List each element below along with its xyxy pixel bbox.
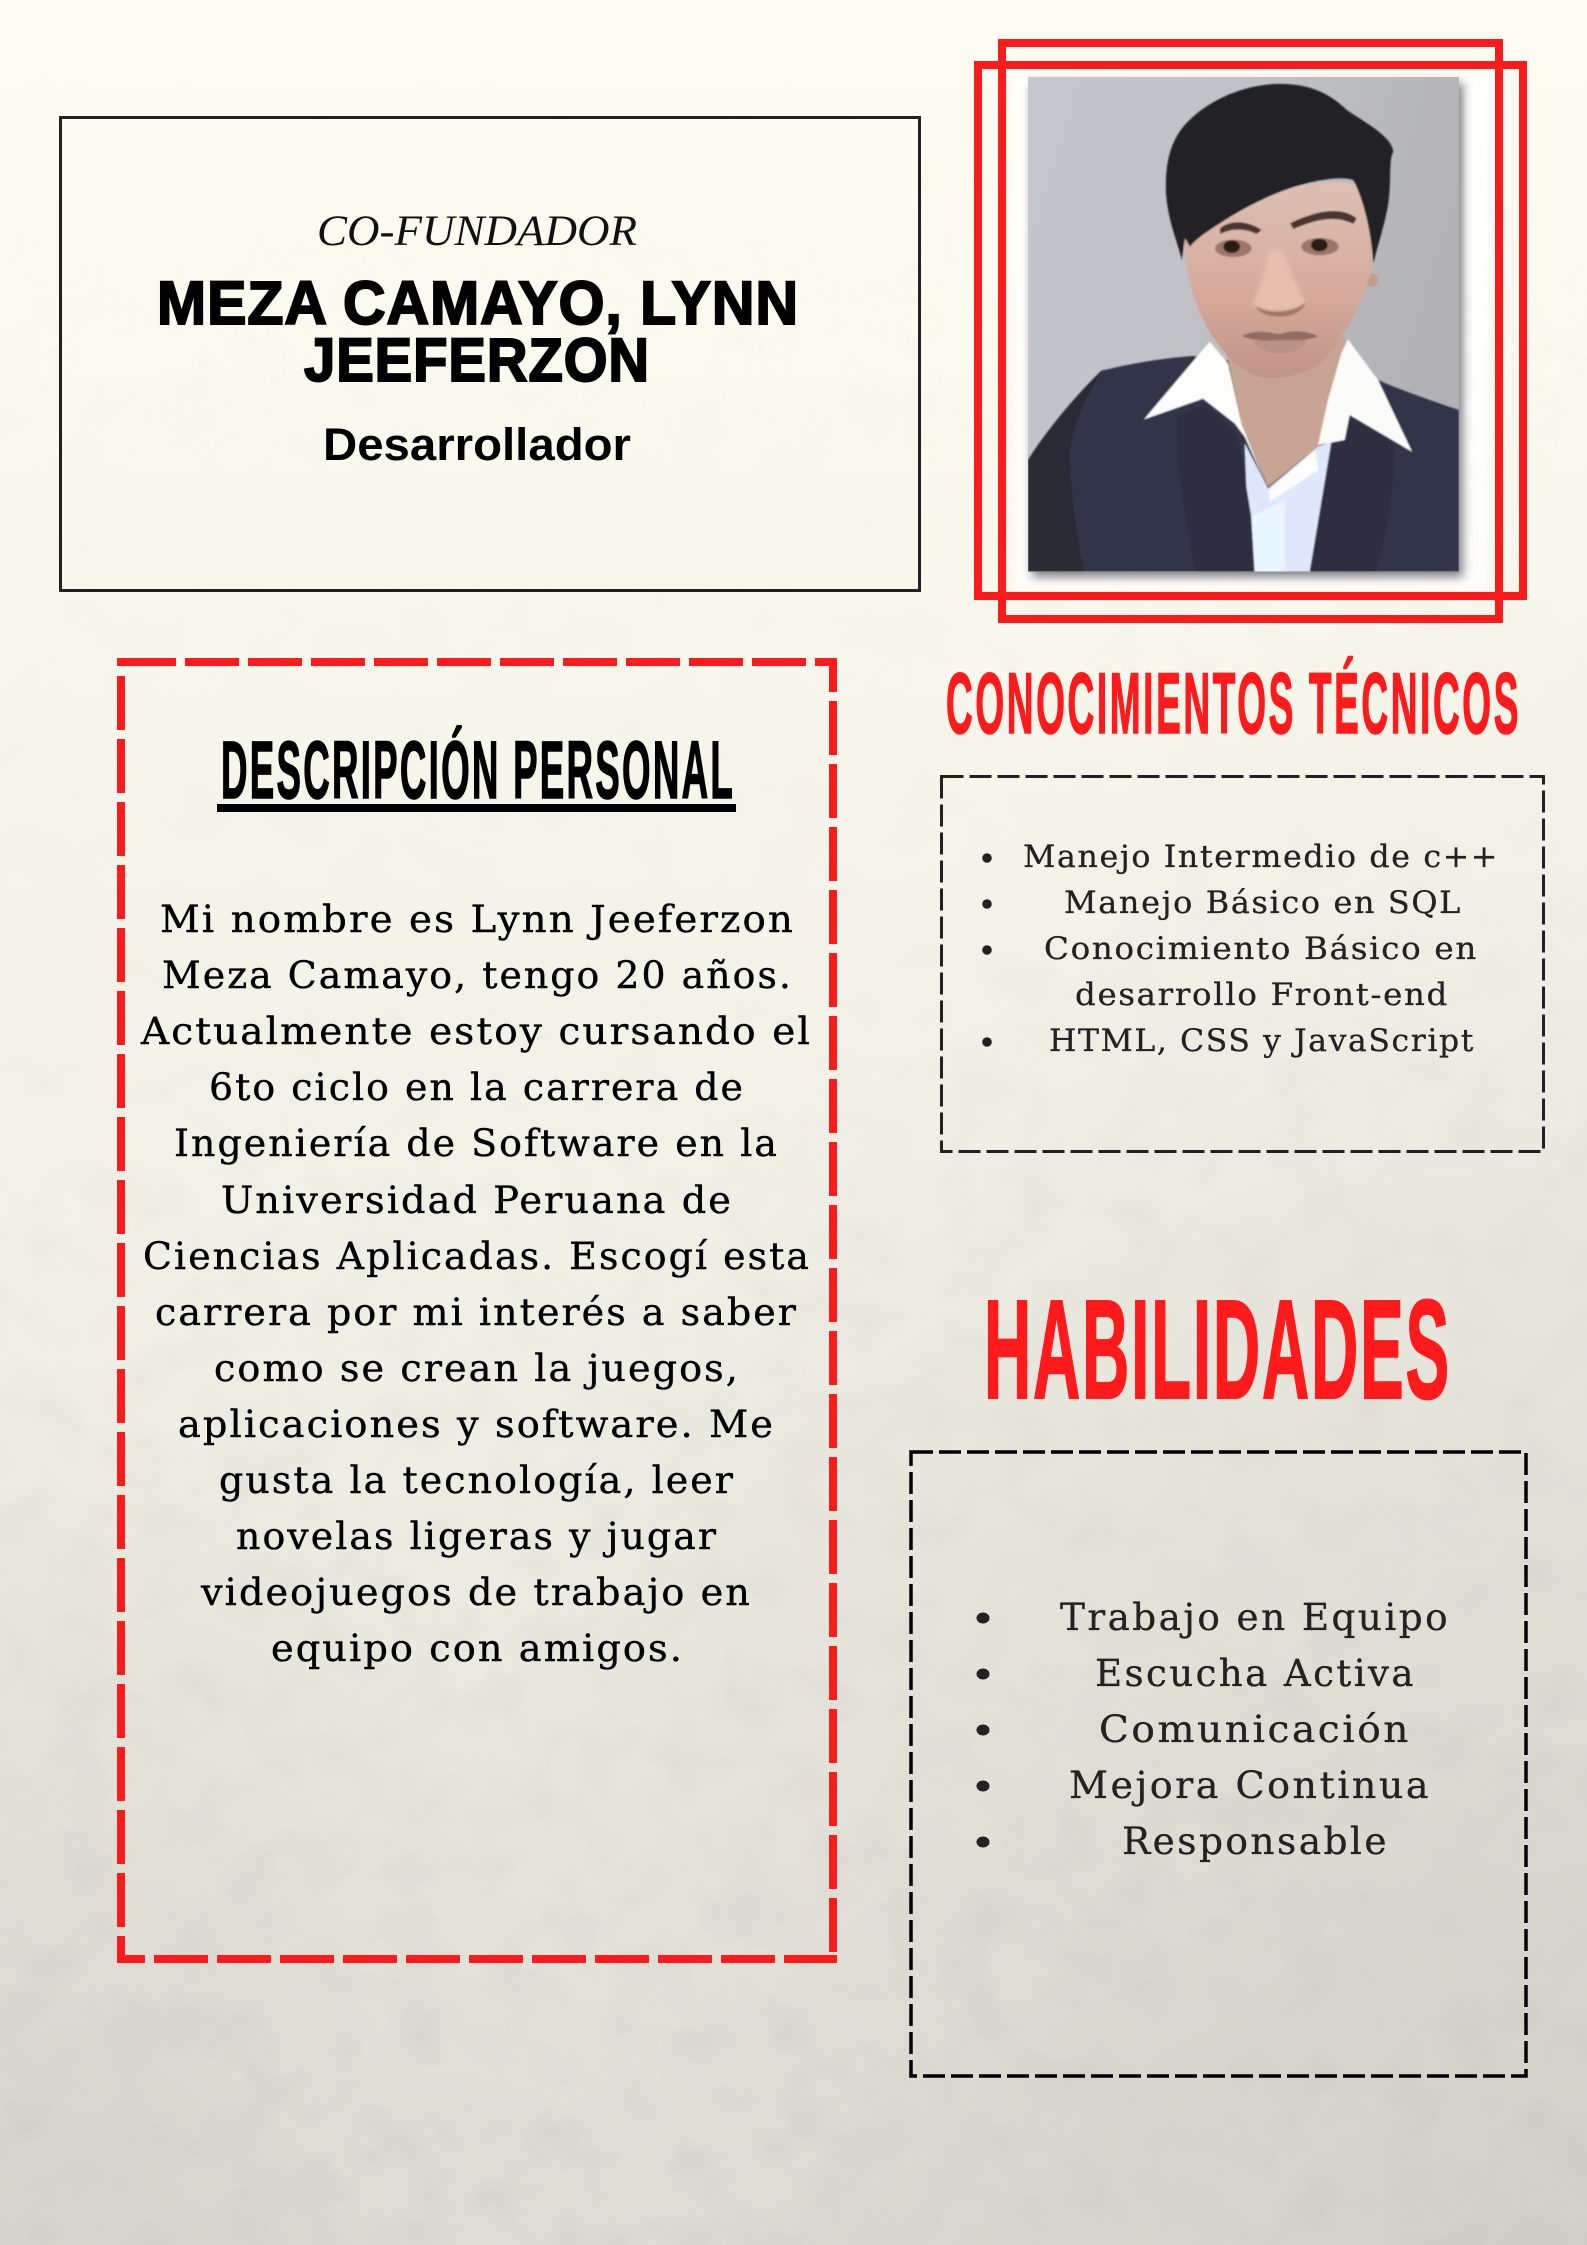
description text: como se crean la juegos, — [214, 1347, 740, 1390]
shirt — [1245, 442, 1331, 572]
photo glow — [1014, 74, 1488, 590]
description text: carrera por mi interés a saber — [155, 1291, 798, 1334]
jacket — [1028, 356, 1459, 572]
shirt placket — [1269, 450, 1319, 502]
description text: videojuegos de trabajo en — [200, 1571, 752, 1614]
list text: Trabajo en Equipo — [1060, 1596, 1450, 1639]
portrait photo — [1028, 77, 1459, 572]
description text: aplicaciones y software. Me — [178, 1403, 775, 1446]
black dashed border — [942, 776, 1544, 1152]
photo with red frames — [978, 43, 1523, 619]
name — [157, 269, 799, 394]
hair — [1166, 84, 1393, 263]
black dashed border — [911, 1452, 1526, 2076]
name: JEEFERZON — [304, 326, 650, 394]
face — [1183, 182, 1372, 378]
eyebrows — [1220, 222, 1262, 234]
nostrils — [1255, 303, 1306, 317]
red dashed border — [117, 658, 837, 1963]
red frame: tall — [1002, 43, 1499, 619]
red frame: wide — [978, 65, 1523, 596]
left collar — [1144, 342, 1268, 488]
list text: Manejo Intermedio de c++ — [1023, 839, 1499, 875]
description text: Ingeniería de Software en la — [174, 1122, 779, 1165]
head — [1166, 84, 1393, 378]
list text — [1060, 1596, 1450, 1863]
description text: Universidad Peruana de — [221, 1179, 733, 1222]
list text: Conocimiento Básico en — [1044, 931, 1478, 967]
right collar — [1318, 339, 1412, 452]
eyes — [1215, 240, 1252, 257]
description text: Mi nombre es Lynn Jeeferzon — [160, 898, 795, 941]
photo shadow — [1032, 83, 1463, 577]
bullets — [976, 1612, 990, 1848]
mouth — [1242, 331, 1318, 342]
panel: personal description — [117, 658, 837, 1963]
role label: CO-FUNDADOR — [317, 208, 637, 255]
description text: 6to ciclo en la carrera de — [209, 1066, 745, 1109]
description text: Actualmente estoy cursando el — [140, 1010, 812, 1053]
name: MEZA CAMAYO, LYNN — [157, 269, 799, 337]
panel: technical knowledge list — [942, 776, 1544, 1152]
description text: novelas ligeras y jugar — [236, 1515, 718, 1558]
heading underline — [217, 804, 736, 812]
panel: personal description: DESCRIPCIÓN PERSONAL — [221, 725, 735, 816]
list text: desarrollo Front-end — [1075, 977, 1449, 1013]
bullets — [982, 853, 992, 1047]
description text: Meza Camayo, tengo 20 años. — [162, 954, 793, 997]
job title: Desarrollador — [323, 419, 631, 470]
description text — [140, 898, 812, 1670]
list text: Manejo Básico en SQL — [1064, 885, 1462, 921]
nose highlight — [1253, 250, 1306, 311]
description text: equipo con amigos. — [271, 1627, 684, 1670]
list text — [1023, 839, 1499, 1059]
list text: Comunicación — [1099, 1708, 1411, 1751]
description text: Ciencias Aplicadas. Escogí esta — [143, 1235, 811, 1278]
list text: Mejora Continua — [1069, 1764, 1431, 1807]
description text: gusta la tecnología, leer — [219, 1459, 735, 1502]
neck — [1225, 337, 1350, 487]
panel: skills list — [911, 1452, 1526, 2076]
list text: Escucha Activa — [1095, 1652, 1416, 1695]
panel: header name box — [60, 118, 920, 590]
list text: Responsable — [1122, 1820, 1389, 1863]
list text: HTML, CSS y JavaScript — [1049, 1023, 1475, 1059]
